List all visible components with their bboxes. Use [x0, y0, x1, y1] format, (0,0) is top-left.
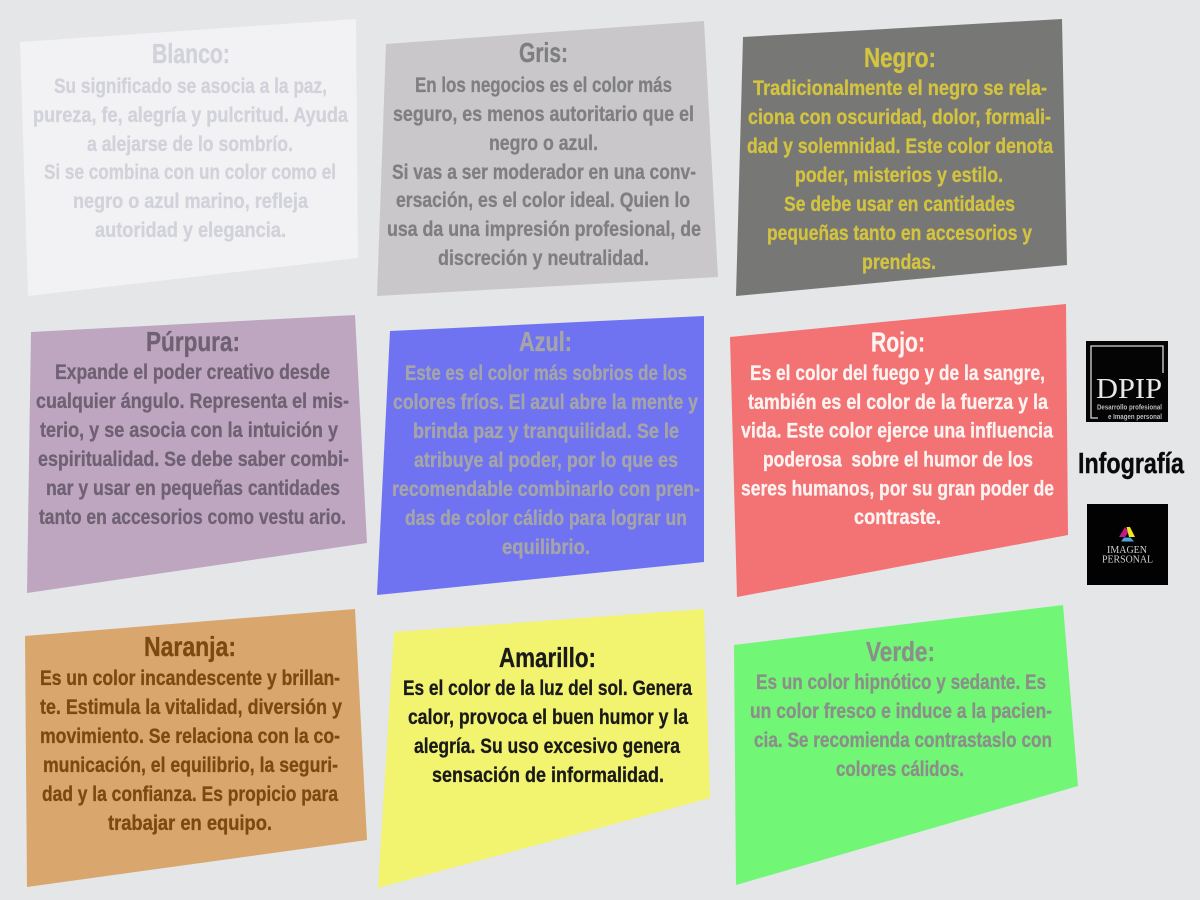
Naranja body text: trabajar en equipo.: [108, 812, 272, 835]
heading: Rojo: Rojo:: [871, 326, 925, 358]
Rojo body text: Es el color del fuego y de la sangre,: [750, 362, 1045, 385]
Blanco body text: [33, 75, 348, 242]
Naranja card background: [25, 609, 367, 887]
Púrpura body text: nar y usar en pequeñas cantidades: [46, 477, 340, 500]
Gris body text: seguro, es menos autoritario que el: [393, 103, 694, 126]
Rojo body text: también es el color de la fuerza y la: [748, 391, 1048, 414]
Púrpura body text: espiritualidad. Se debe saber combi-: [38, 448, 349, 471]
Azul body text: equilibrio.: [502, 536, 590, 559]
Gris body text: discreción y neutralidad.: [438, 247, 649, 270]
logo: DPIP: [1086, 341, 1168, 422]
DPIP tagline: Desarrollo profesional: [1097, 402, 1162, 412]
logo: Imagen Personal: [1087, 504, 1168, 585]
icon: tricolor triangles: [1119, 527, 1135, 542]
panel: Gris: [377, 21, 718, 296]
Blanco body text: Su significado se asocia a la paz,: [54, 75, 327, 98]
Negro body text: ciona con oscuridad, dolor, formali-: [748, 106, 1051, 129]
Naranja body text: municación, el equilibrio, la seguri-: [43, 754, 338, 777]
panel: Blanco: [20, 19, 358, 296]
DPIP logo black square: [1086, 341, 1168, 422]
Azul body text: Este es el color más sobrios de los: [405, 362, 687, 385]
Rojo card background: [730, 304, 1068, 597]
DPIP tagline: [1097, 402, 1162, 421]
Imagen Personal wordmark: [1102, 545, 1153, 566]
Negro body text: [747, 77, 1053, 274]
Blanco body text: Si se combina con un color como el: [44, 161, 336, 184]
Púrpura body text: cualquier ángulo. Representa el mis-: [36, 390, 349, 413]
panel: Rojo: [730, 304, 1068, 597]
Verde body text: cia. Se recomienda contrastaslo con: [754, 729, 1052, 752]
Blanco body text: negro o azul marino, refleja: [73, 190, 308, 213]
Rojo body text: seres humanos, por su gran poder de: [741, 478, 1054, 500]
Naranja body text: te. Estimula la vitalidad, diversión y: [40, 696, 342, 719]
Negro body text: dad y solemnidad. Este color denota: [747, 135, 1053, 158]
heading: Púrpura: Púrpura:: [146, 326, 240, 357]
Púrpura card background: [27, 315, 367, 593]
Amarillo body text: [403, 677, 692, 787]
heading: Naranja: Naranja:: [144, 631, 236, 662]
Amarillo body text: sensación de informalidad.: [432, 764, 664, 787]
heading: Negro: Negro:: [864, 42, 936, 73]
Gris body text: Si vas a ser moderador en una conv-: [392, 161, 696, 184]
Gris body text: [387, 74, 701, 270]
Verde body text: colores cálidos.: [836, 758, 964, 781]
panel: Naranja: [25, 609, 367, 887]
Rojo body text: [741, 362, 1054, 529]
Amarillo card background: [378, 609, 710, 888]
DPIP tagline: e Imagen personal: [1108, 412, 1162, 421]
Verde card background: [734, 605, 1078, 885]
Blanco body text: autoridad y elegancia.: [95, 219, 286, 242]
Imagen Personal black square: [1087, 504, 1168, 585]
Negro card background: [736, 19, 1067, 296]
Rojo body text: vida. Este color ejerce una influencia: [741, 420, 1053, 442]
Azul body text: [392, 362, 700, 559]
Verde body text: un color fresco e induce a la pacien-: [750, 700, 1052, 723]
Amarillo body text: alegría. Su uso excesivo genera: [414, 735, 680, 758]
Negro body text: pequeñas tanto en accesorios y: [767, 222, 1032, 245]
Imagen Personal wordmark: IMAGEN: [1107, 545, 1147, 556]
Negro body text: poder, misterios y estilo.: [795, 164, 1003, 187]
heading: Gris: Gris:: [519, 37, 568, 68]
Azul card background: [377, 316, 704, 595]
Negro body text: prendas.: [862, 251, 936, 274]
Azul body text: recomendable combinarlo con pren-: [392, 478, 700, 501]
Negro body text: Tradicionalmente el negro se rela-: [753, 77, 1047, 100]
panel: Negro: [736, 19, 1067, 296]
Blanco body text: a alejarse de lo sombrío.: [87, 133, 293, 156]
heading: Blanco: Blanco:: [152, 38, 230, 69]
panel: Azul: [377, 316, 704, 595]
Púrpura body text: terio, y se asocia con la intuición y: [40, 419, 338, 442]
Azul body text: atribuye al poder, por lo que es: [414, 449, 678, 472]
panel: Verde: [734, 605, 1078, 885]
Imagen Personal wordmark: PERSONAL: [1102, 554, 1153, 566]
Verde body text: [750, 671, 1052, 781]
Negro body text: Se debe usar en cantidades: [784, 193, 1015, 216]
Púrpura body text: tanto en accesorios como vestu ario.: [39, 506, 346, 529]
Naranja body text: movimiento. Se relaciona con la co-: [40, 725, 340, 748]
DPIP lettering: DPIP: [1096, 373, 1162, 405]
heading: Amarillo: Amarillo:: [499, 642, 596, 673]
Verde body text: Es un color hipnótico y sedante. Es: [756, 671, 1046, 694]
Gris body text: usa da una impresión profesional, de: [387, 218, 701, 241]
Rojo body text: contraste.: [854, 506, 941, 529]
panel: Amarillo: [378, 609, 710, 888]
Azul body text: colores fríos. El azul abre la mente y: [393, 391, 698, 414]
Gris body text: En los negocios es el color más: [415, 74, 672, 97]
Rojo body text: poderosa sobre el humor de los: [763, 448, 1033, 472]
Naranja body text: [40, 667, 342, 835]
Naranja body text: dad y la confianza. Es propicio para: [42, 783, 338, 806]
heading: Verde: Verde:: [866, 636, 935, 667]
panel: Púrpura: [27, 315, 367, 593]
Púrpura body text: Expande el poder creativo desde: [55, 361, 330, 384]
Blanco body text: pureza, fe, alegría y pulcritud. Ayuda: [33, 104, 348, 127]
Púrpura body text: [36, 361, 349, 529]
heading: Azul: Azul:: [519, 326, 572, 357]
Azul body text: das de color cálido para lograr un: [405, 507, 687, 530]
DPIP logo frame: [1091, 346, 1163, 418]
Gris body text: ersación, es el color ideal. Quien lo: [396, 189, 690, 212]
Naranja body text: Es un color incandescente y brillan-: [40, 667, 340, 690]
Amarillo body text: Es el color de la luz del sol. Genera: [403, 677, 692, 700]
Amarillo body text: calor, provoca el buen humor y la: [408, 706, 688, 729]
Gris card background: [377, 21, 718, 296]
Blanco card background: [20, 19, 358, 296]
Gris body text: negro o azul.: [489, 132, 598, 155]
Azul body text: brinda paz y tranquilidad. Se le: [413, 420, 679, 443]
